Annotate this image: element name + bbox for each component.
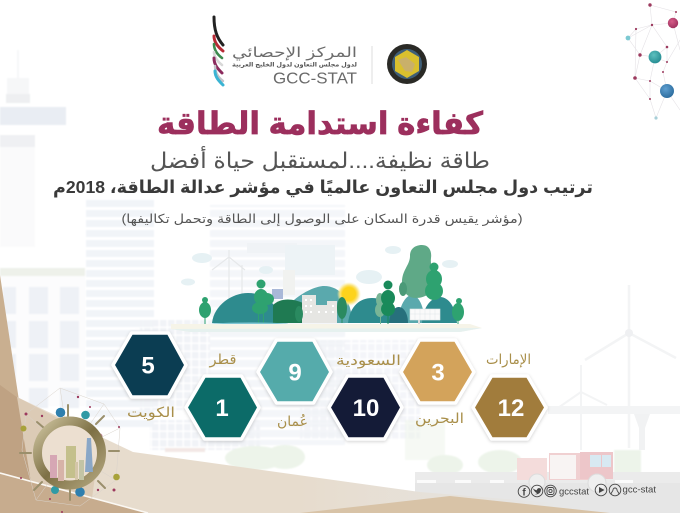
label: Kuwait: الكويت — [127, 404, 175, 421]
towers behind hills — [283, 270, 295, 295]
fire truck, faint — [517, 452, 613, 492]
ground platform — [171, 322, 482, 332]
hexagon: Bahrain 3 — [401, 340, 474, 403]
hexagon: Saudi Arabia 10 — [329, 376, 402, 439]
hexagon: Kuwait 5 — [113, 333, 186, 397]
icon: coloured ribbon — [214, 17, 223, 85]
faint wind turbine — [212, 250, 245, 300]
ground and road — [415, 472, 680, 513]
main hills — [280, 286, 352, 323]
subtitle: طاقة نظيفة....لمستقبل حياة أفضل — [150, 146, 490, 173]
logo Latin name: GCC-STAT — [273, 70, 358, 88]
title: كفاءة استدامة الطاقة — [157, 106, 484, 141]
hexagon: UAE 12: 12 — [498, 395, 524, 422]
hexagon: Qatar 1 — [186, 376, 259, 439]
wind turbines and bridge, faint — [548, 285, 680, 450]
heading: GCC ranking: ترتيب دول مجلس التعاون عالميًا في مؤشر عدالة الطاقة، 2018م — [53, 177, 593, 198]
hexagon: Saudi Arabia 10: 10 — [353, 395, 379, 422]
icons: social media — [518, 484, 621, 497]
striped towers — [86, 200, 154, 430]
faint green bushes — [225, 420, 641, 475]
illustration: green city scene — [171, 243, 482, 332]
label: Saudi Arabia: السعودية — [336, 352, 401, 369]
icon: GCC emblem — [387, 44, 427, 84]
hexagon: Oman 9: 9 — [288, 360, 302, 386]
hexagon: Kuwait 5: 5 — [141, 352, 155, 380]
handle: gccstat: gccstat — [559, 486, 589, 498]
hexagon: Qatar 1: 1 — [215, 395, 229, 422]
logo Arabic subtitle: لدول مجلس التعاون لدول الخليج العربية — [232, 62, 357, 68]
big soft tree — [402, 245, 434, 298]
label: Bahrain: البحرين — [415, 410, 464, 427]
grey buildings — [302, 295, 337, 323]
left tower — [0, 50, 66, 247]
icon: top right network decoration — [626, 3, 680, 120]
handle: gcc-stat: gcc-stat — [622, 484, 656, 496]
sun — [337, 282, 361, 306]
white building — [410, 309, 440, 324]
left building — [0, 268, 85, 408]
label: Oman: عُمان — [277, 413, 308, 429]
logo Arabic name: المركز الإحصائي — [232, 44, 357, 61]
right hills — [348, 298, 394, 323]
text: index definition note: (مؤشر يقيس قدرة السكان على الوصول إلى الطاقة وتحمل تكاليفها) — [122, 212, 522, 227]
bottom beige and tan ground shapes — [0, 275, 680, 513]
hexagon: Oman 9 — [258, 340, 331, 403]
hexagon chart: energy ranking by country — [113, 333, 546, 439]
hexagon: UAE 12 — [473, 376, 546, 439]
icon: compass ring with skyline — [20, 388, 120, 513]
label: UAE: الإمارات — [486, 351, 531, 368]
hexagon: Bahrain 3: 3 — [431, 360, 445, 386]
label: Qatar: قطر — [208, 351, 236, 368]
clouds — [181, 246, 458, 286]
background: faint city skyline — [0, 50, 641, 475]
trees — [199, 262, 464, 325]
social media footer — [518, 484, 656, 498]
social media footer: f — [522, 488, 526, 498]
logo: GCC-STAT — [214, 17, 427, 88]
